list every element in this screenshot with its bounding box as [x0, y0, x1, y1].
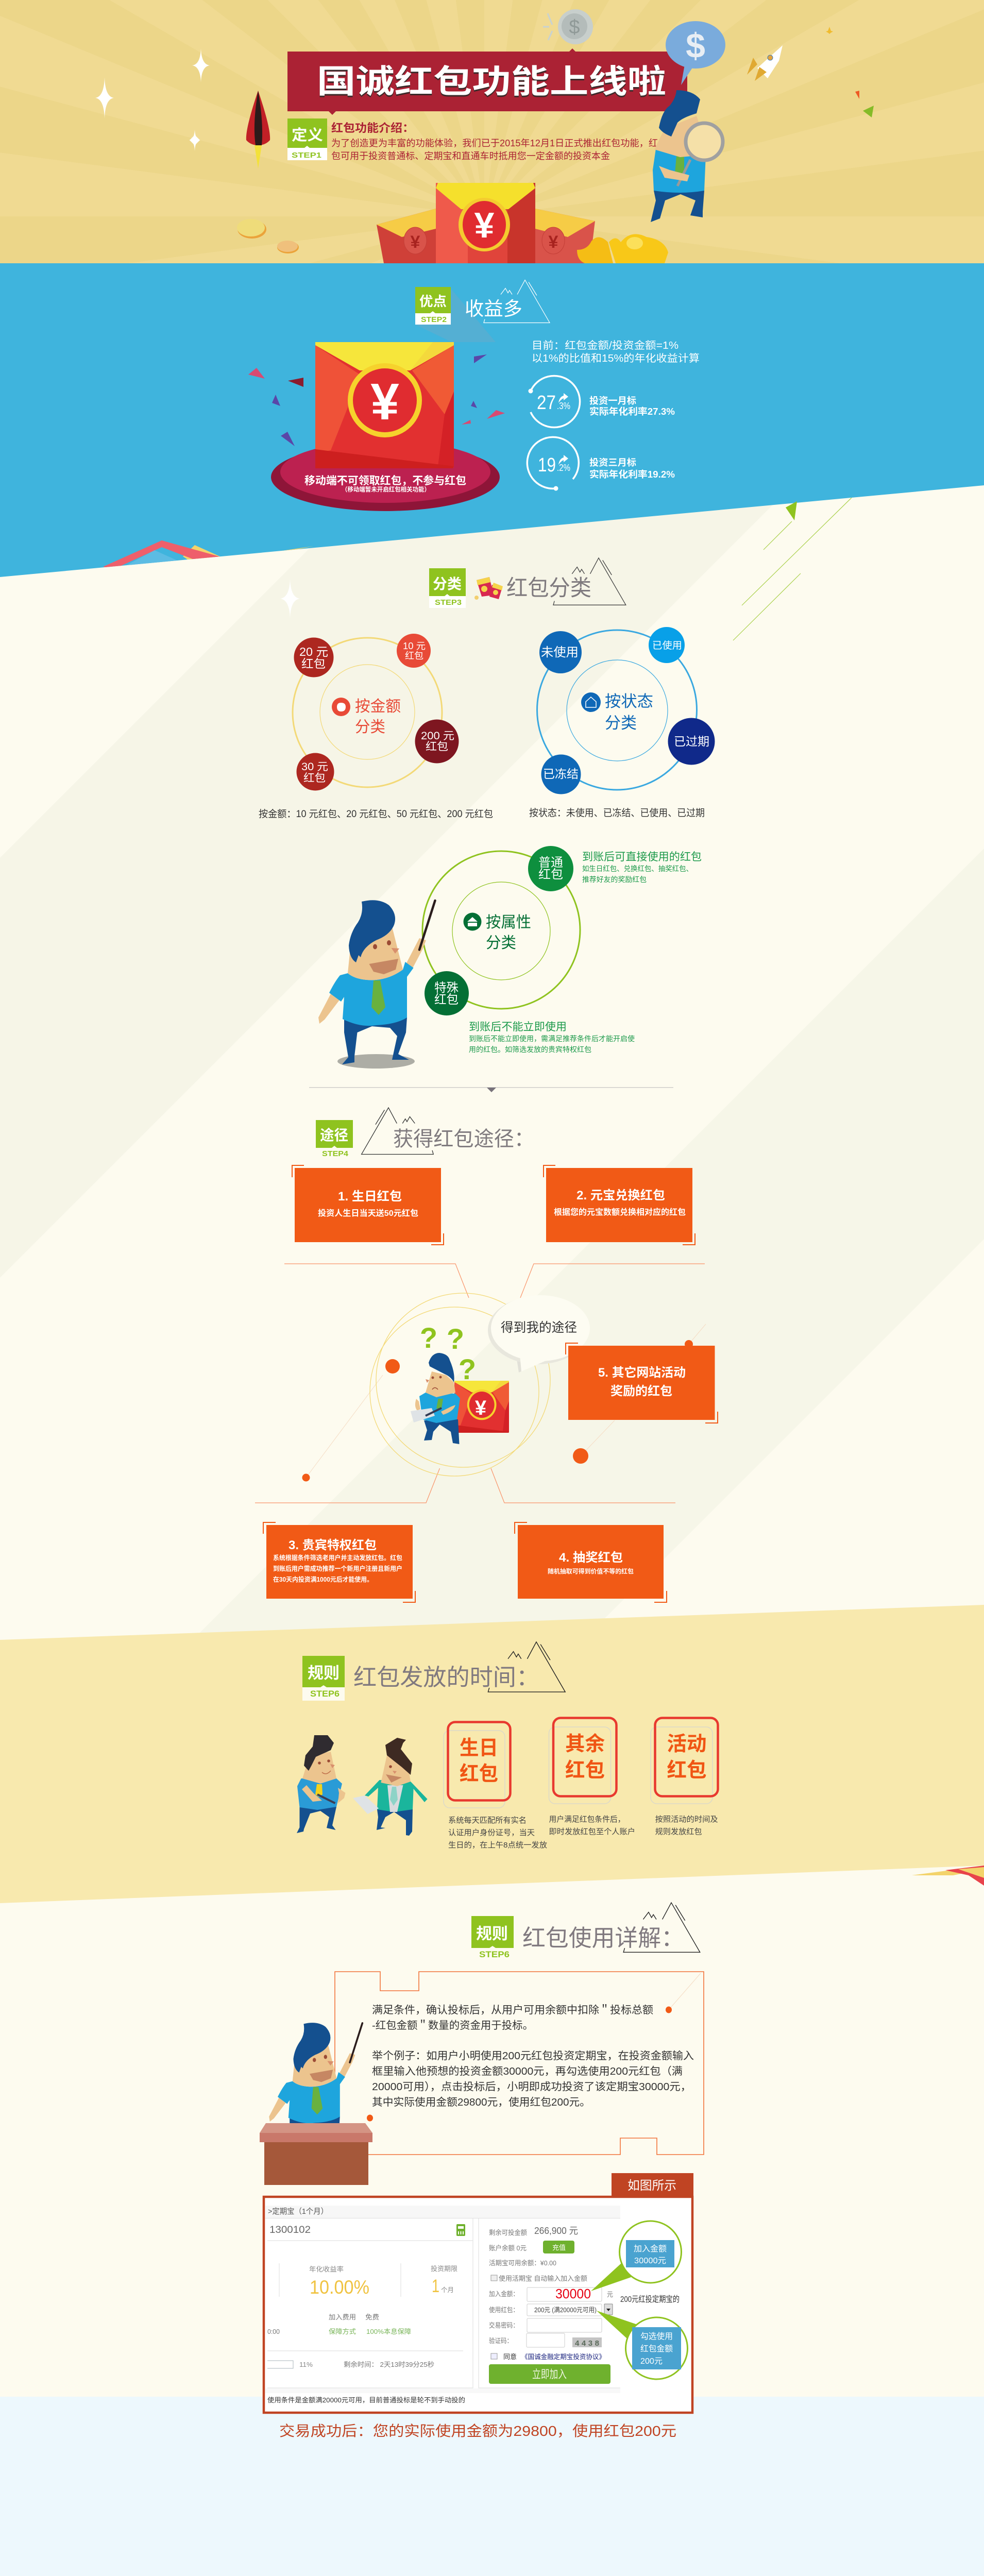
investment form panel: 交易密码： — [489, 2321, 519, 2329]
card: activity packet: 红包 — [667, 1759, 707, 1782]
section: yellow rules background — [0, 1605, 984, 1903]
metric: 19.2 percent: .2% — [557, 463, 570, 473]
icon: envelope with thinking man — [411, 1353, 509, 1444]
callout: tick packet amount: 红包金额 — [640, 2344, 673, 2353]
explanatory text: 框里输入他预想的投资金额30000元，再勾选使用200元红包（满 — [372, 2065, 683, 2077]
card 1: birthday packet: 1. 生日红包 — [338, 1190, 402, 1204]
note text: 200元红投定期宝的 — [620, 2295, 680, 2304]
step badge: rules: 规则 — [476, 1925, 508, 1943]
investment form panel: 活期宝可用余额：¥0.00 — [489, 2259, 556, 2267]
panel: ways to get packets — [255, 1108, 718, 1602]
card 2: ingot exchange packet — [544, 1165, 695, 1245]
notched frame — [335, 1972, 704, 2155]
step badge: rules: STEP6 — [479, 1950, 510, 1959]
rate explanation: 目前：红包金额/投资金额=1% — [532, 340, 678, 351]
product details panel: 1 — [432, 2276, 439, 2296]
metric: 19.2 percent: 19 — [538, 454, 556, 476]
step badge: ways: STEP4 — [322, 1149, 349, 1158]
step badge: ways — [316, 1120, 353, 1158]
product details panel: 剩余时间： 2天13时39分25秒 — [344, 2361, 434, 2368]
captcha: 4438 — [575, 2339, 599, 2348]
bubble: 200 yuan — [415, 719, 459, 764]
bubble: 10 yuan: 10 元 — [403, 641, 426, 651]
icon: red envelopes: ¥ — [474, 205, 495, 245]
section: light blue footer background — [0, 2397, 984, 2576]
mobile note text: （移动端暂未开启红包相关功能） — [342, 485, 430, 493]
heading: release time: 红包发放的时间： — [353, 1664, 539, 1690]
text: ordinary packet description: 到账后可直接使用的红包 — [582, 851, 702, 863]
heading: how to get packets: 获得红包途径： — [393, 1128, 534, 1150]
metric: 27.3 percent: .3% — [557, 401, 570, 411]
orange dots — [302, 1340, 693, 1482]
caption: other — [549, 1815, 635, 1836]
callout: tick packet amount: 勾选使用 — [640, 2332, 673, 2341]
character: man pointing — [318, 900, 435, 1069]
icon: red envelopes: ¥ — [411, 232, 420, 252]
mobile note text: 移动端不可领取红包，不参与红包 — [304, 474, 466, 487]
card: activity packet: 活动 — [667, 1733, 707, 1755]
metric: 27.3 percent: 27 — [537, 392, 556, 414]
card 3: VIP privilege packet: 3. 贵宾特权红包 — [289, 1538, 377, 1552]
frame dots — [367, 1973, 701, 2122]
bubble: special packet: 特殊 — [434, 981, 459, 995]
form inputs — [527, 2287, 602, 2347]
chart: classified by attribute: 按属性 — [486, 914, 531, 931]
card 3: VIP privilege packet: 在30天内投资满1000元后才能使用。 — [273, 1575, 373, 1583]
investment form panel: 使用红包： — [489, 2306, 519, 2314]
icon: mountain outline — [488, 1642, 565, 1692]
decor: chevrons on blue edge — [103, 540, 313, 567]
button: join now: 立即加入 — [532, 2368, 567, 2381]
callout: tick packet amount — [597, 2311, 687, 2379]
tag: as shown: 如图所示 — [627, 2179, 676, 2193]
bubble: used — [649, 627, 685, 663]
card 5: other site activities — [566, 1343, 718, 1423]
text: ordinary packet description: 如生日红包、兑换红包、抽奖红包、 — [582, 865, 693, 873]
icon: mountain outline — [553, 558, 626, 605]
card 5: other site activities: 奖励的红包 — [610, 1384, 672, 1398]
page title bar — [265, 2206, 620, 2218]
metric: 27.3 percent: 实际年化利率27.3% — [589, 406, 675, 417]
speech bubble: my way: 得到我的途径 — [501, 1320, 577, 1335]
step badge: category: STEP3 — [435, 598, 462, 607]
floating triangles — [248, 354, 505, 446]
explanatory text: 举个例子：如用户小明使用200元红包投资定期宝，在投资金额输入 — [372, 2050, 694, 2062]
icon: red envelopes: ¥ — [549, 232, 558, 252]
icon: white rocket — [747, 45, 783, 81]
caption: activity: 按照活动的时间及 — [655, 1815, 718, 1824]
caption: other: 用户满足红包条件后， — [549, 1815, 625, 1824]
chart: classified by amount: 按金额 — [355, 698, 401, 715]
mobile note text — [304, 474, 466, 493]
bubble: expired: 已过期 — [674, 735, 709, 748]
metric: 27.3 percent — [529, 376, 675, 428]
step badge: rules: STEP6 — [310, 1689, 340, 1699]
yellow rings — [370, 1293, 550, 1476]
bubble: unused: 未使用 — [541, 646, 579, 659]
bubble: 20 yuan — [294, 638, 334, 677]
explanatory text: 20000可用），点击投标后，小明即成功投资了该定期宝30000元， — [372, 2081, 691, 2093]
chart: classified by attribute — [422, 846, 580, 1015]
icon: silver dollar coin: $ — [569, 16, 580, 38]
card: birthday packet: 生日 — [460, 1737, 498, 1759]
card 2: ingot exchange packet: 根据您的元宝数额兑换相对应的红包 — [554, 1207, 686, 1217]
text: ordinary packet description: 推荐好友的奖励红包 — [582, 875, 647, 884]
character: man at podium — [260, 2023, 372, 2185]
investment form panel: 剩余可投金额 — [489, 2229, 527, 2236]
icon: mountain outline — [623, 1903, 700, 1952]
step badge: rules: 规则 — [308, 1664, 340, 1682]
card: activity packet — [651, 1718, 718, 1804]
investment form panel: 加入金额： — [489, 2290, 519, 2298]
divider with arrow — [309, 1087, 673, 1092]
character: blue shirt man — [297, 1735, 345, 1833]
text: special packet description: 用的红包。如筛选发放的贵宾特权红包 — [469, 1045, 591, 1054]
step badge: advantage: 优点 — [419, 294, 447, 309]
product details panel: 100%本息保障 — [366, 2328, 411, 2335]
caption: by status: 按状态：未使用、已冻结、已使用、已过期 — [529, 807, 705, 819]
text: ordinary packet description — [582, 851, 702, 884]
bubble: 10 yuan — [397, 634, 431, 668]
icons: question marks — [420, 1321, 476, 1385]
step badge: ways: 途径 — [320, 1127, 348, 1143]
icon: envelope with thinking man: ¥ — [475, 1397, 487, 1419]
bubble: special packet: 红包 — [434, 993, 459, 1007]
product details panel: 保障方式 — [329, 2328, 356, 2335]
panel: screenshot example — [264, 2173, 693, 2413]
bubble: unused — [539, 631, 582, 673]
chart: classified by status: 分类 — [605, 714, 637, 732]
product details panel: 10.00% — [310, 2277, 369, 2298]
card 2: ingot exchange packet: 2. 元宝兑换红包 — [576, 1188, 665, 1202]
chart: classified by status — [537, 627, 715, 794]
investment form panel: 266,900 元 — [534, 2226, 578, 2236]
metric: 27.3 percent: 投资一月标 — [589, 396, 636, 406]
icon: large red envelope: ¥ — [370, 373, 399, 431]
investment form panel: 元 — [607, 2291, 613, 2298]
icon: left rocket — [246, 91, 270, 168]
intro text: 为了创造更为丰富的功能体验，我们已于2015年12月1日正式推出红包功能，红 — [331, 138, 658, 148]
step badge: category: 分类 — [433, 576, 462, 592]
section: header — [95, 9, 874, 265]
button: top up: 充值 — [552, 2244, 566, 2251]
decor: red chevrons at right edge — [912, 1866, 984, 1886]
step badge: definition: 定义 — [292, 127, 323, 144]
investment form panel: 《国诚金融定期宝投资协议》 — [521, 2353, 605, 2361]
icons: question marks: ? — [459, 1353, 476, 1385]
icon: silver dollar coin — [543, 9, 593, 44]
step badge: definition — [287, 118, 327, 160]
card: other packet: 其余 — [565, 1733, 605, 1755]
chart: classified by amount — [293, 634, 459, 790]
explanatory text: -红包金额＂数量的资金用于投标。 — [372, 2020, 533, 2031]
bubble: 200 yuan: 红包 — [426, 741, 448, 753]
investment form panel — [479, 2218, 620, 2388]
card 5: other site activities: 5. 其它网站活动 — [598, 1366, 686, 1380]
page title bar: >定期宝（1个月） — [268, 2207, 328, 2216]
card 4: lottery packet: 随机抽取可得到价值不等的红包 — [548, 1567, 634, 1575]
base ellipse with mobile note — [271, 441, 500, 511]
bubble: ordinary packet — [528, 846, 573, 891]
icon: gold ingots — [577, 234, 668, 263]
icon: blue dollar speech bubble: $ — [686, 26, 705, 65]
intro text: 红包功能介绍： — [331, 122, 414, 134]
investment form panel: 使用活期宝 自动输入加入金额 — [499, 2275, 587, 2282]
heading: packet classification: 红包分类 — [506, 576, 591, 601]
usage condition note: 使用条件是金额满20000元可用，目前普通投标是轮不到手动投的 — [267, 2396, 465, 2404]
bubble: ordinary packet: 红包 — [538, 868, 563, 882]
button: top up — [543, 2241, 574, 2253]
speech bubble: my way — [488, 1295, 590, 1372]
icon: mountain outline — [362, 1108, 433, 1154]
metric: 19.2 percent — [527, 437, 675, 490]
investment form panel: 30000 — [555, 2286, 591, 2301]
caption: birthday — [448, 1816, 547, 1850]
explanatory text: 满足条件，确认投标后，从用户可用余额中扣除＂投标总额 — [372, 2004, 653, 2016]
icon: green calculator — [456, 2224, 465, 2236]
title banner — [287, 48, 687, 115]
metric: 19.2 percent: 投资三月标 — [589, 457, 636, 468]
card 3: VIP privilege packet: 系统根据条件筛选老用户并主动发放红包。红包 — [273, 1554, 402, 1562]
product details panel: 投资期限 — [431, 2265, 457, 2273]
section: blue background — [0, 263, 984, 577]
callout: join amount — [591, 2221, 681, 2291]
icon: red envelopes — [377, 183, 595, 265]
bubble: frozen: 已冻结 — [543, 767, 579, 781]
chart: classified by amount: 分类 — [355, 719, 385, 736]
panel: blue advantages — [248, 280, 700, 511]
explanatory text — [372, 2004, 694, 2108]
icon: twin red packets — [474, 577, 503, 600]
panel: packet release timing — [297, 1642, 718, 1850]
bubble: used: 已使用 — [652, 640, 682, 651]
card 4: lottery packet: 4. 抽奖红包 — [559, 1551, 623, 1565]
connector lines — [255, 1264, 705, 1503]
investment form panel: 同意 — [503, 2353, 517, 2361]
card 3: VIP privilege packet: 到账后用户需成功推荐一个新用户注册且新用户 — [273, 1565, 402, 1572]
card: other packet — [549, 1718, 616, 1804]
card 4: lottery packet — [515, 1522, 667, 1602]
text: special packet description: 到账后不能立即使用，需满足推荐条件后才能开启使 — [469, 1035, 635, 1043]
panel: red packet categories — [259, 558, 715, 1069]
intro text: 包可用于投资普通标、定期宝和直通车时抵用您一定金额的投资本金 — [331, 151, 610, 161]
step badge: definition: STEP1 — [292, 151, 321, 160]
intro text — [331, 122, 658, 161]
bubble: special packet — [425, 971, 469, 1015]
caption: other: 即时发放红包至个人账户 — [549, 1827, 635, 1836]
bubble: 30 yuan: 30 元 — [301, 761, 328, 773]
callout: join amount: 30000元 — [634, 2257, 666, 2265]
header ray background — [0, 0, 984, 264]
bubble: 20 yuan: 红包 — [301, 657, 326, 670]
callout: tick packet amount: 200元 — [640, 2357, 663, 2366]
tag: as shown — [612, 2173, 693, 2197]
bubble: expired — [668, 718, 715, 765]
thin dot rays — [306, 1324, 706, 1478]
select arrow — [604, 2304, 613, 2315]
investment form panel: 验证码： — [489, 2337, 513, 2345]
card: birthday packet: 红包 — [460, 1763, 498, 1785]
decor: green lines and triangle — [733, 498, 852, 640]
product details panel: 年化收益率 — [309, 2265, 344, 2273]
chart: classified by attribute: 分类 — [486, 935, 516, 952]
rate explanation: 以1%的比值和15%的年化收益计算 — [532, 352, 700, 364]
bubble: 200 yuan: 200 元 — [421, 730, 454, 742]
panel: usage details — [260, 1903, 704, 2185]
product details panel: 0:00 — [267, 2328, 280, 2335]
bubble: frozen — [541, 754, 581, 794]
bubble: 30 yuan: 红包 — [303, 772, 326, 784]
icon: gold coins — [237, 219, 299, 253]
card 3: VIP privilege packet — [263, 1522, 415, 1602]
step badge: rules — [471, 1916, 514, 1959]
caption: birthday: 认证用户身份证号，当天 — [448, 1828, 535, 1837]
character: man with magnifier — [651, 90, 723, 222]
badge long shadow — [415, 289, 496, 342]
caption: activity: 规则发放红包 — [655, 1827, 702, 1836]
investment form panel: 账户余额 0元 — [489, 2244, 527, 2252]
card 1: birthday packet: 投资人生日当天送50元红包 — [318, 1208, 418, 1218]
icons: question marks: ? — [447, 1323, 464, 1355]
explanatory text: 其中实际使用金额29800元，使用红包200元。 — [372, 2096, 590, 2108]
icon: blue dollar speech bubble — [666, 21, 725, 85]
bubble: 10 yuan: 红包 — [405, 651, 423, 661]
callout: join amount: 加入金额 — [634, 2244, 667, 2253]
pale diagonal background bands — [0, 464, 984, 1700]
small decor triangles — [826, 27, 874, 117]
character: teal jacket man — [353, 1738, 428, 1836]
bubble: 30 yuan — [297, 753, 334, 790]
text: special packet description — [469, 1021, 635, 1054]
button: join now — [489, 2364, 610, 2384]
product details panel: 加入费用 — [329, 2313, 356, 2321]
result summary text: 交易成功后：您的实际使用金额为29800，使用红包200元 — [279, 2423, 676, 2439]
screenshot frame — [264, 2197, 692, 2413]
card 1: birthday packet — [292, 1165, 444, 1245]
caption: by amount: 按金额：10 元红包、20 元红包、50 元红包、200 元红包 — [259, 808, 493, 820]
caption: birthday: 系统每天匹配所有实名 — [448, 1816, 527, 1825]
product details panel: 个月 — [441, 2286, 454, 2294]
metric: 19.2 percent: 实际年化利率19.2% — [589, 469, 675, 480]
step badge: rules — [302, 1656, 345, 1701]
caption: activity — [655, 1815, 718, 1836]
investment form panel: 200元 (满20000元可用) — [534, 2306, 597, 2314]
rate explanation — [532, 340, 700, 364]
heading: usage explained: 红包使用详解： — [522, 1925, 684, 1951]
text: special packet description: 到账后不能立即使用 — [469, 1021, 567, 1033]
icon: large red envelope — [315, 342, 454, 468]
step badge: advantage — [415, 287, 451, 325]
icon: mountain outline — [484, 280, 550, 323]
caption: birthday: 生日的，在上午8点统一发放 — [448, 1841, 547, 1850]
product details panel: 免费 — [365, 2313, 379, 2321]
icons: question marks: ? — [420, 1321, 437, 1354]
title banner: 国诚红包功能上线啦 — [317, 64, 666, 100]
product details panel: 11% — [299, 2361, 313, 2368]
chart: classified by status: 按状态 — [605, 692, 653, 710]
step badge: category — [429, 568, 466, 608]
step badge: advantage: STEP2 — [421, 315, 447, 324]
product details panel: 1300102 — [269, 2225, 311, 2235]
bubble: 20 yuan: 20 元 — [299, 645, 328, 658]
product details panel — [265, 2218, 620, 2393]
card: other packet: 红包 — [565, 1759, 605, 1782]
bubble: ordinary packet: 普通 — [538, 856, 563, 870]
card: birthday packet — [444, 1722, 510, 1808]
decor: white sparkle — [280, 579, 300, 618]
heading: high returns: 收益多 — [465, 298, 522, 319]
sparkle stars — [95, 48, 210, 151]
